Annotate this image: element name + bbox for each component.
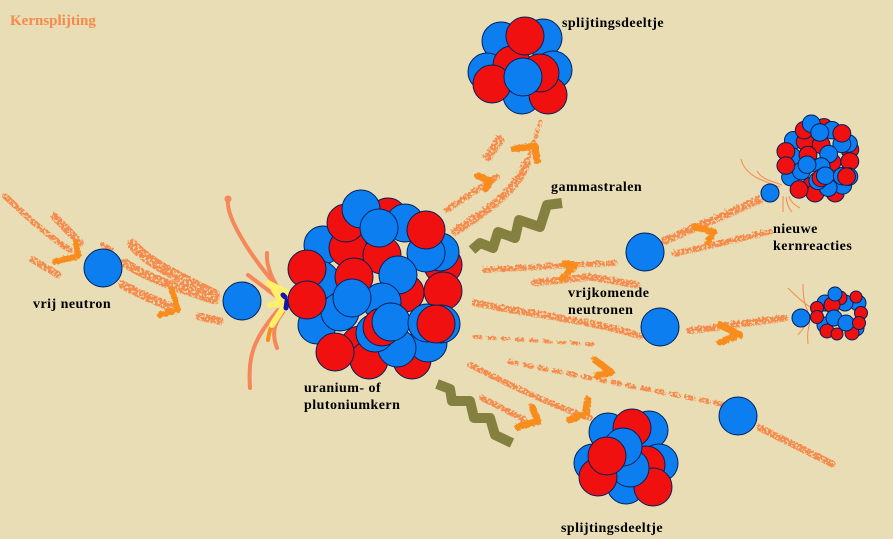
uranium nucleus xyxy=(288,190,462,379)
label: fission fragment top: splijtingsdeeltje xyxy=(562,16,664,31)
label: uranium or plutonium nucleus: plutoniumkern xyxy=(304,398,400,413)
title: Kernsplijting xyxy=(10,13,96,29)
label: new nuclear reactions: kernreacties xyxy=(773,239,852,254)
label: fission fragment bottom: splijtingsdeeltje xyxy=(561,521,663,536)
released neutrons xyxy=(626,233,757,435)
label: free neutron: vrij neutron xyxy=(33,297,111,312)
gamma ray lower xyxy=(437,384,512,443)
arrowheads: incoming trails xyxy=(55,242,178,315)
arrowheads xyxy=(478,146,740,427)
neutron hitting the nucleus xyxy=(223,282,261,320)
label: released neutrons: vrijkomende xyxy=(568,286,649,301)
fission trails xyxy=(447,122,832,464)
new reaction lower xyxy=(788,284,868,344)
fission fragment top xyxy=(468,17,572,114)
impact burst xyxy=(224,196,292,388)
free neutron xyxy=(84,249,122,287)
arrow: incoming neutron trails xyxy=(6,197,220,321)
label: uranium or plutonium nucleus: uranium- of xyxy=(304,381,381,396)
fission fragment bottom xyxy=(574,409,678,506)
new reaction upper xyxy=(741,115,859,212)
label: released neutrons: neutronen xyxy=(568,303,633,318)
label: gamma rays: gammastralen xyxy=(551,180,642,195)
label: new nuclear reactions: nieuwe xyxy=(773,222,818,237)
gamma ray upper xyxy=(472,203,562,250)
